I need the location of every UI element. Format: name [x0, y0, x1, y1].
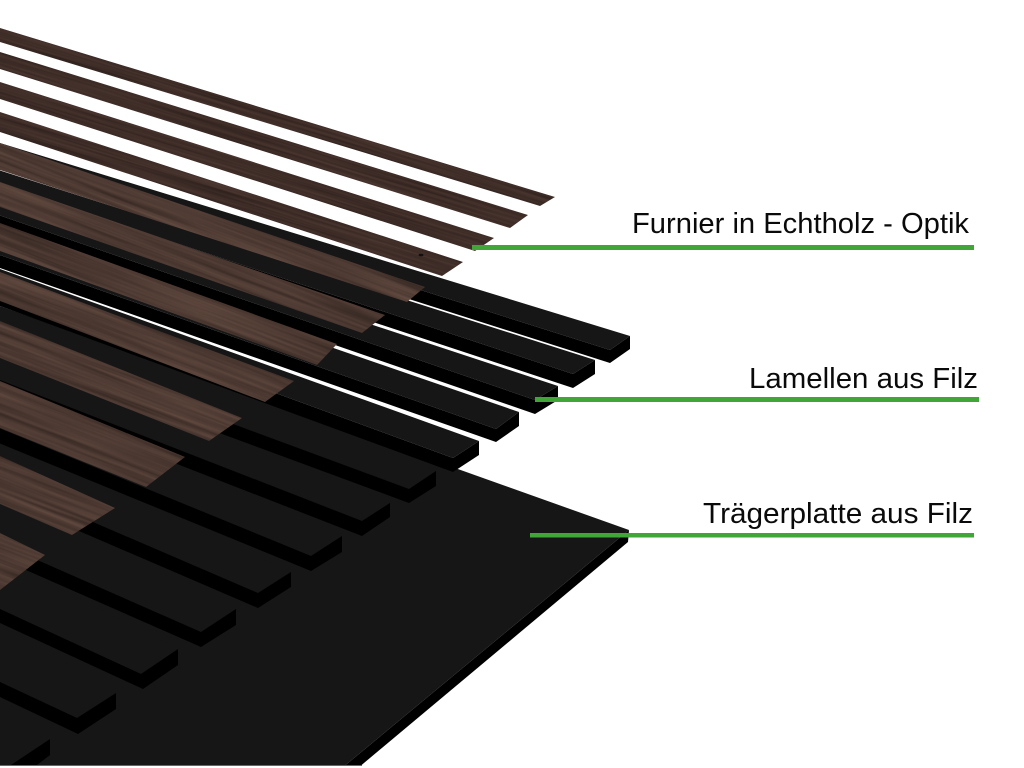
- veneer strip 2: [0, 52, 528, 228]
- leader line: carrier board: [530, 533, 974, 538]
- veneer strip 6: [0, 182, 385, 333]
- bottom image edge: [0, 765, 400, 768]
- callout: felt slats: [535, 363, 979, 402]
- leader line: felt slats: [535, 397, 979, 402]
- callout: veneer: [472, 208, 974, 250]
- veneer strip 8: [0, 272, 294, 402]
- felt slat 1: [0, 143, 630, 363]
- veneer strip 1: [0, 28, 555, 206]
- veneer strip 11: [0, 456, 115, 535]
- felt slat 3: [0, 202, 558, 414]
- felt slat 6: [0, 306, 436, 503]
- felt slat 5: [0, 269, 479, 472]
- felt slat 8: [0, 396, 342, 571]
- carrier board face: [0, 306, 629, 768]
- label: felt slats: Lamellen aus Filz: [749, 363, 978, 395]
- carrier board: [0, 306, 629, 768]
- wood knot on veneer strip 4: [418, 254, 424, 256]
- veneer strip 4: [0, 112, 463, 276]
- leader line: veneer: [472, 245, 974, 250]
- veneer strip 9: [0, 321, 242, 441]
- felt slat 9: [0, 444, 291, 608]
- felt slats layer: [0, 143, 630, 765]
- veneer strips layer: [0, 28, 555, 590]
- veneer strip 7: [0, 223, 337, 365]
- label: carrier board: Trägerplatte aus Filz: [703, 498, 973, 530]
- felt slat 12: [0, 624, 116, 734]
- felt slat 4: [0, 233, 519, 442]
- felt slat 13 end: [11, 739, 50, 765]
- label: veneer: Furnier in Echtholz - Optik: [632, 208, 969, 240]
- felt slat 7: [0, 352, 390, 536]
- felt slat 11: [0, 559, 178, 689]
- callout: carrier board: [530, 498, 974, 538]
- veneer strip 10: [0, 381, 185, 487]
- felt slat 10: [0, 498, 236, 647]
- carrier board edge: [342, 530, 629, 768]
- felt slat 2: [0, 170, 595, 388]
- veneer strip 5: [0, 143, 425, 302]
- veneer strip 3: [0, 82, 494, 251]
- veneer strip 12: [0, 533, 45, 590]
